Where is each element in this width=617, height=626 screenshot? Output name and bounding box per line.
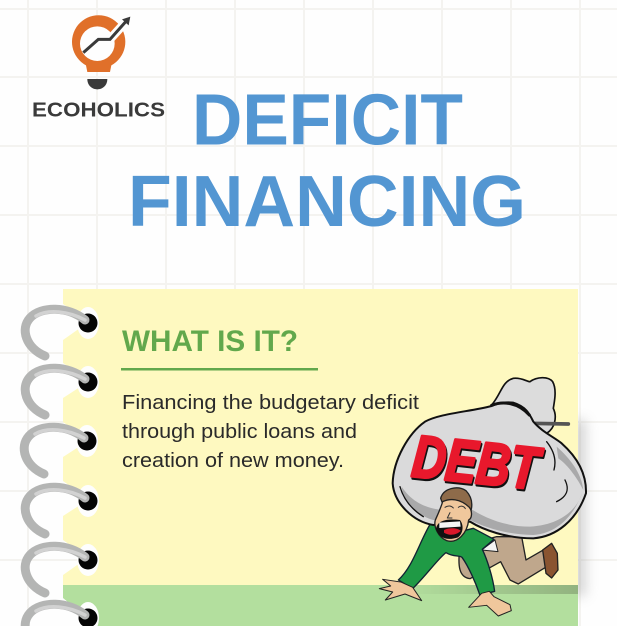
- title: FINANCING: [128, 162, 526, 242]
- hands: [379, 579, 511, 616]
- trousers and shoe: [459, 537, 558, 584]
- green shirt and arms: [398, 522, 495, 595]
- notebook paper with notched edge: [63, 289, 578, 585]
- icon: light bulb with growth arrow: [72, 15, 130, 89]
- title: DEFICIT: [192, 80, 463, 160]
- page shadow: [570, 420, 586, 596]
- man's head: [435, 488, 472, 541]
- text block: definition: through public loans and: [122, 421, 357, 443]
- green ground strip: [63, 585, 578, 626]
- money bag: [393, 402, 586, 538]
- text block: definition: creation of new money.: [122, 450, 344, 472]
- label: DEBT: DEBT: [409, 423, 545, 503]
- heading: what is it: WHAT IS IT?: [122, 325, 298, 358]
- money bag knot: [492, 378, 555, 433]
- text block: definition: Financing the budgetary deficit: [122, 392, 419, 414]
- label: DEBT: DEBT: [410, 425, 547, 505]
- logo wordmark: ECOHOLICS: [32, 100, 165, 122]
